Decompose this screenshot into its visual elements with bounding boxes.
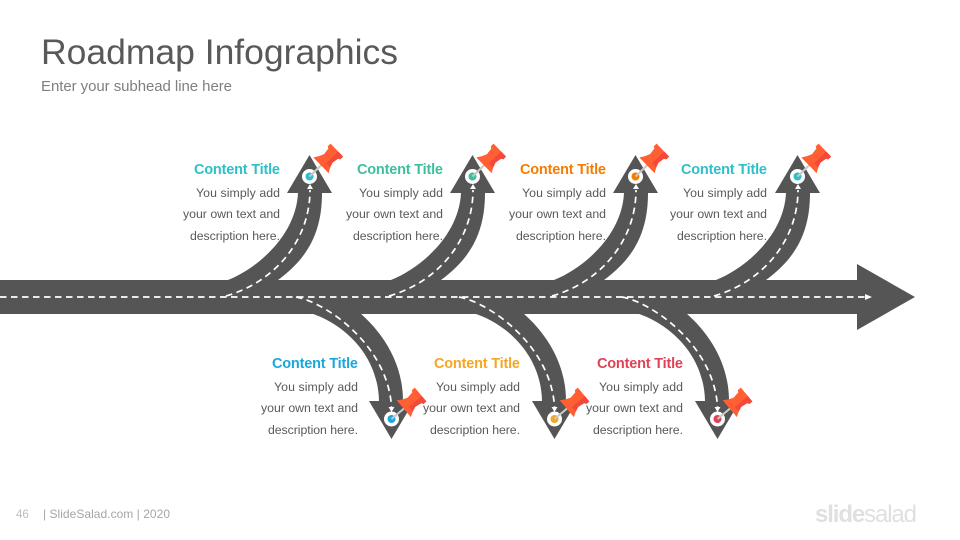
branch down 3 [622, 297, 754, 439]
text block 6: description here. [430, 423, 520, 437]
text block 4: your own text and [670, 207, 767, 221]
logo wordmark: slidesalad [815, 501, 917, 528]
branch up 2 [389, 142, 507, 296]
text block 7: You simply add [599, 380, 683, 394]
text block 3: your own text and [509, 207, 606, 221]
text block 5: your own text and [261, 401, 358, 415]
text block 4: description here. [677, 229, 767, 243]
text block 6 [423, 356, 520, 437]
text block 3: You simply add [522, 186, 606, 200]
subhead: Enter your subhead line here [41, 78, 232, 95]
text block 3: Content Title [520, 162, 606, 178]
text block 1: your own text and [183, 207, 280, 221]
text block 2: You simply add [359, 186, 443, 200]
text block 3: description here. [516, 229, 606, 243]
branch down 1 [296, 297, 428, 439]
footer page number and source: | SlideSalad.com | 2020 [43, 507, 170, 521]
footer page number and source: 46 [16, 509, 29, 521]
text block 4: You simply add [683, 186, 767, 200]
text block 5: You simply add [274, 380, 358, 394]
text block 1 [183, 162, 280, 243]
text block 6: You simply add [436, 380, 520, 394]
text block 1: You simply add [196, 186, 280, 200]
branch down 2 [459, 297, 591, 439]
text block 7: Content Title [597, 356, 683, 372]
text block 6: Content Title [434, 356, 520, 372]
main road arrow [0, 264, 915, 330]
text block 2: your own text and [346, 207, 443, 221]
text block 4 [670, 162, 767, 243]
text block 7: description here. [593, 423, 683, 437]
branch up 4 [714, 142, 832, 296]
text block 5: Content Title [272, 356, 358, 372]
text block 7 [586, 356, 683, 437]
text block 7: your own text and [586, 401, 683, 415]
text block 2 [346, 162, 443, 243]
text block 6: your own text and [423, 401, 520, 415]
text block 4: Content Title [681, 162, 767, 178]
text block 5: description here. [268, 423, 358, 437]
text block 2: description here. [353, 229, 443, 243]
branch up 1 [226, 142, 344, 296]
text block 3 [509, 162, 606, 243]
title: Roadmap Infographics [41, 32, 398, 72]
text block 1: description here. [190, 229, 280, 243]
branch up 3 [552, 142, 670, 296]
text block 2: Content Title [357, 162, 443, 178]
text block 1: Content Title [194, 162, 280, 178]
text block 5 [261, 356, 358, 437]
